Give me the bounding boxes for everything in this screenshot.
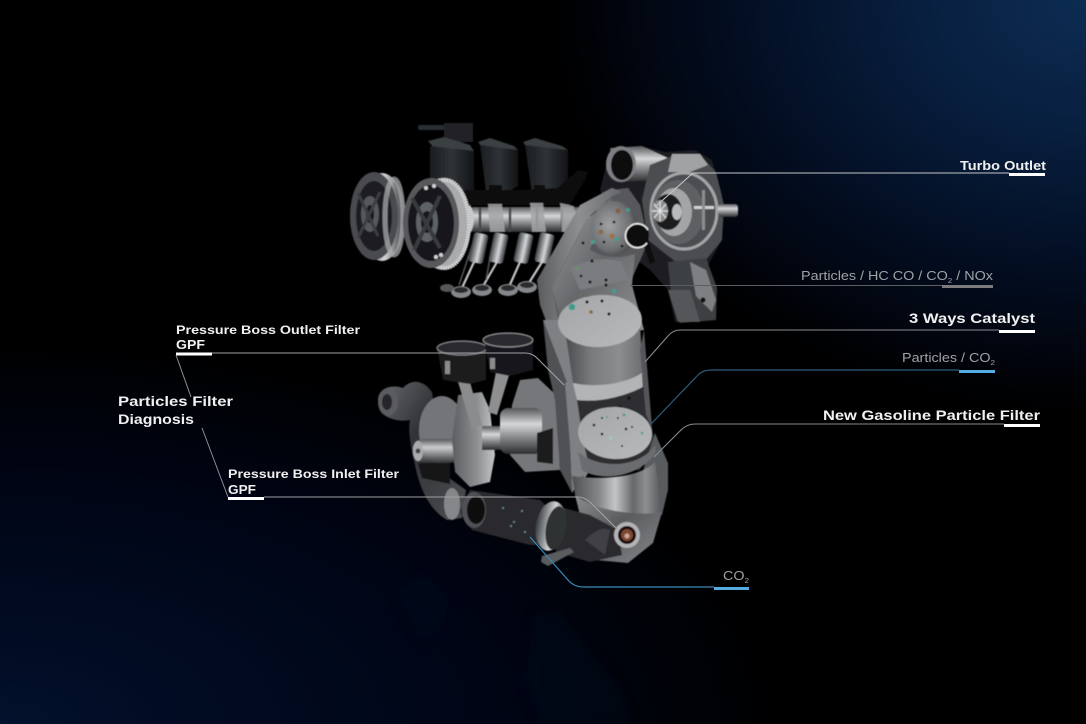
- callout: particles CO2: [650, 351, 995, 425]
- label: particles HC CO CO2 NOx: / NOx: [952, 269, 994, 283]
- icon: particle filter disc: [577, 405, 653, 461]
- label: pressure boss outlet filter: Pressure Boss Outlet Filter: [176, 323, 360, 337]
- icon: crankshaft and intake runner: [378, 378, 560, 520]
- icon: pistons: [437, 333, 533, 428]
- icon: black hose with white ring: [625, 223, 655, 264]
- callout: CO2 outlet: [530, 537, 749, 590]
- label: 3 ways catalyst: 3 Ways Catalyst: [909, 310, 1035, 326]
- label: GPF inlet: GPF: [228, 483, 256, 497]
- label: pressure boss inlet filter: Pressure Boss Inlet Filter: [228, 467, 399, 481]
- engine reflection: [395, 575, 630, 724]
- icon: filter lower can: [572, 433, 668, 563]
- label: CO2: CO: [723, 569, 742, 583]
- callout: particles HC CO CO2 NOx: [630, 269, 994, 288]
- icon: three way catalyst disc: [557, 293, 643, 349]
- callout: particles filter diagnosis: [118, 355, 234, 497]
- label: particles CO2: 2: [991, 360, 995, 367]
- label: GPF outlet: GPF: [176, 338, 205, 352]
- label: particles CO2: Particles / CO: [902, 351, 979, 365]
- callout: new gasoline particle filter: [654, 407, 1041, 457]
- label: particles HC CO CO2 NOx: Particles / HC CO / CO: [801, 269, 929, 283]
- icon: catalyst converter body: [543, 320, 655, 493]
- icon: exhaust outlet pipe: [444, 488, 622, 566]
- callout: pressure boss outlet filter: [176, 323, 564, 385]
- label: diagnosis: Diagnosis: [118, 411, 194, 427]
- label: new gasoline particle filter: New Gasoline Particle Filter: [823, 407, 1041, 423]
- label: particles HC CO CO2 NOx: 2: [948, 278, 952, 285]
- label: CO2: 2: [745, 578, 749, 585]
- label: turbo outlet: Turbo Outlet: [960, 159, 1047, 173]
- icon: turbocharger: [600, 146, 738, 323]
- icon: ignition coils: [418, 123, 588, 217]
- callout: pressure boss inlet filter: [228, 467, 617, 529]
- label: particles filter: Particles Filter: [118, 393, 234, 409]
- icon: front camshaft pulley: [403, 178, 471, 270]
- icon: rear camshaft pulley: [350, 172, 405, 261]
- icon: exhaust manifold head: [537, 188, 655, 345]
- callout: 3 ways catalyst: [645, 310, 1035, 362]
- engine illustration: [350, 123, 738, 566]
- icon: valves: [440, 232, 555, 298]
- icon: outlet boss: [614, 522, 640, 548]
- callout: turbo outlet: [655, 159, 1047, 207]
- icon: camshaft: [464, 203, 590, 234]
